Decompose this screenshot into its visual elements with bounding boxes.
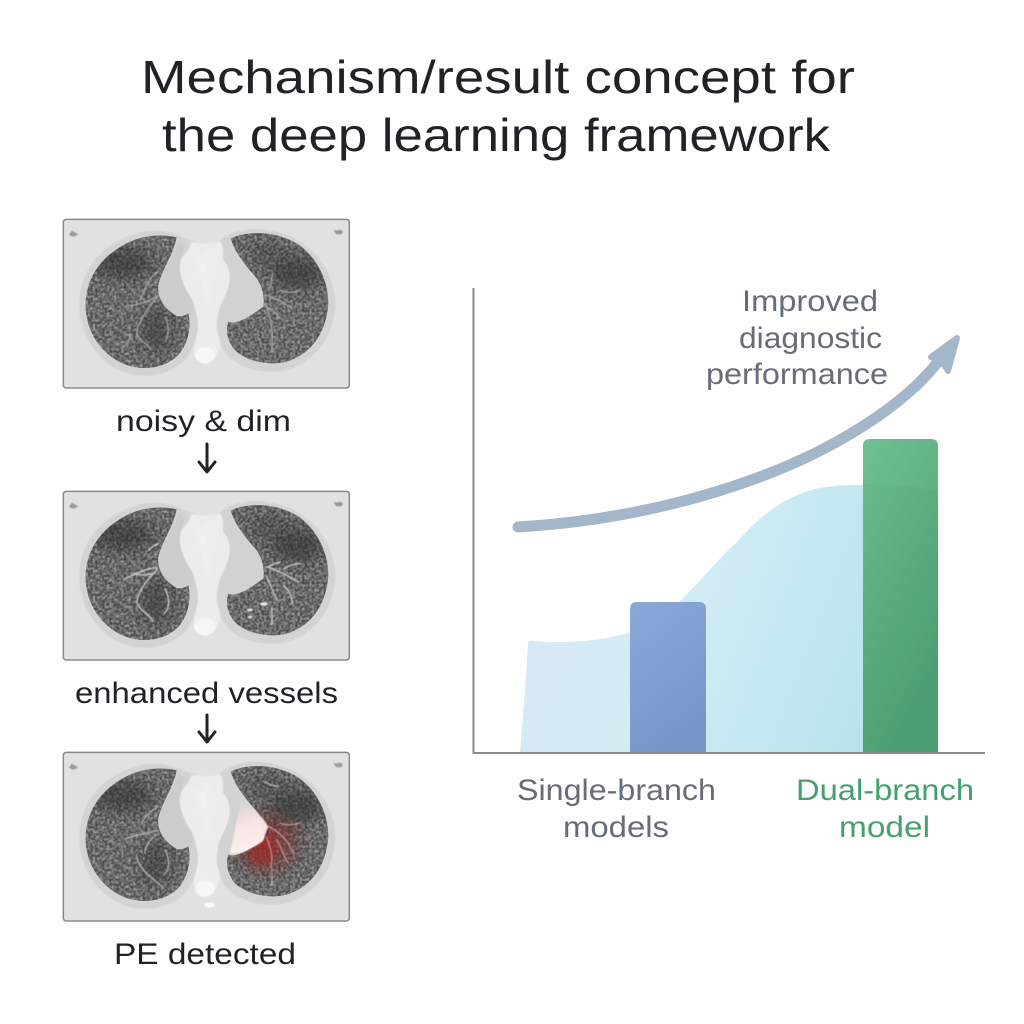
arrow: improvement trend bbox=[518, 338, 957, 527]
panel: enhanced CT scan bbox=[63, 491, 349, 660]
panel: noisy CT scan bbox=[63, 219, 349, 388]
panel: PE detected CT scan bbox=[63, 752, 349, 921]
label: single-branch models: Single-branch bbox=[517, 774, 716, 807]
bar: single-branch models bbox=[630, 602, 706, 753]
title: Mechanism/result concept for bbox=[141, 51, 855, 103]
label: enhanced vessels: enhanced vessels bbox=[75, 677, 338, 710]
chart: performance comparison bbox=[474, 285, 985, 844]
area: performance curve bbox=[520, 485, 938, 753]
label: noisy & dim: noisy & dim bbox=[116, 405, 291, 438]
axes bbox=[474, 288, 985, 753]
label: improved diagnostic performance bbox=[706, 285, 888, 391]
pale heart overlay bbox=[230, 801, 268, 854]
label: improved diagnostic performance: performance bbox=[706, 358, 888, 391]
label: improved diagnostic performance: Improved bbox=[742, 285, 878, 318]
highlight: red PE region bbox=[229, 806, 308, 881]
label: dual-branch model: Dual-branch bbox=[796, 774, 974, 807]
title bbox=[141, 51, 855, 161]
arrow: enhanced to detected bbox=[199, 715, 215, 742]
label: PE detected: PE detected bbox=[114, 938, 296, 971]
label: improved diagnostic performance: diagnostic bbox=[739, 322, 882, 355]
arrow: noisy to enhanced bbox=[199, 444, 215, 472]
label: single-branch models bbox=[517, 774, 716, 844]
label: single-branch models: models bbox=[563, 811, 669, 844]
title: the deep learning framework bbox=[162, 109, 831, 161]
bar: dual-branch model bbox=[863, 439, 938, 753]
overlay: curve seen through bar bbox=[863, 484, 938, 753]
label: dual-branch model bbox=[796, 774, 974, 844]
label: dual-branch model: model bbox=[839, 811, 930, 844]
